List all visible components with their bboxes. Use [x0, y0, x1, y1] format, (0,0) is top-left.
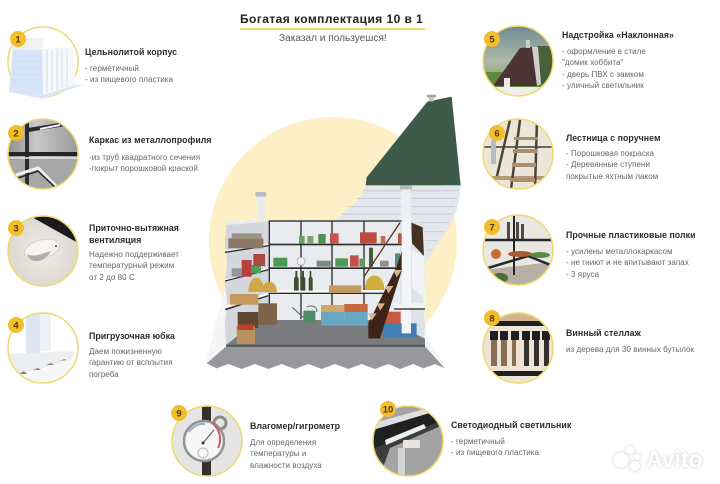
text: item 5: - уличный светильник: [562, 81, 644, 90]
cellar cutaway illustration: [206, 95, 461, 369]
icon 9: hygrometer: [172, 406, 242, 476]
badge 4: 4: [13, 320, 19, 332]
icon 7: shelves: [483, 215, 553, 286]
avito watermark: [614, 446, 703, 472]
badge 1: 1: [15, 34, 21, 46]
text: item 4: гарантию от всплытия: [89, 358, 173, 367]
slab: [207, 345, 445, 369]
floor: [226, 320, 425, 345]
icon 9 ring: [172, 406, 242, 476]
badge 7: 7: [489, 222, 495, 234]
text: item 7: Прочные пластиковые полки: [566, 230, 696, 240]
badge 10: [380, 401, 396, 417]
text: item 6: - Деревянные ступени: [566, 160, 650, 169]
text: item 7: - 3 яруса: [566, 270, 599, 279]
text: item 2: Каркас из металлопрофиля: [89, 135, 212, 145]
avito watermark: Avito: [646, 446, 703, 472]
icon 4 ring: [8, 313, 78, 383]
stairs: [364, 223, 402, 338]
text: item 4: погреба: [89, 370, 119, 379]
icon 3: ventilation: [8, 216, 80, 286]
crates and jars left: [228, 233, 277, 344]
text: item 4: Даем пожизненную: [89, 347, 162, 356]
text: item 3: Надежно поддерживает: [89, 250, 179, 259]
text: item 8: Винный стеллаж: [566, 328, 641, 338]
text: item 4: [89, 331, 175, 379]
badge 1: [10, 31, 26, 47]
hatch: [411, 223, 424, 256]
icon 6: stairs: [483, 119, 553, 189]
stepped white upper body: [335, 186, 461, 265]
text: item 10: Светодиодный светильник: [451, 420, 571, 430]
bottles: [294, 271, 313, 291]
text: item 7: - не гниют и не впитывают запах: [566, 258, 689, 267]
text: item 5: - оформление в стиле: [562, 47, 646, 56]
icon 8: wine rack: [483, 313, 553, 383]
green roof: [366, 97, 461, 185]
badge 9: [171, 405, 187, 421]
left vent pipe: [255, 192, 266, 220]
text: item 6: покрытые яхтным лаком: [566, 172, 658, 181]
text: item 10: [451, 420, 572, 457]
text: item 4: Пригрузочная юбка: [89, 331, 175, 341]
badge 5: [484, 31, 500, 47]
text: item 1: - из пищевого пластика: [85, 75, 173, 84]
icon 5 ring: [483, 26, 553, 96]
icon 10 ring: [373, 406, 443, 476]
icon 2: metal frame: [8, 119, 78, 190]
central yellow circle: [209, 117, 457, 365]
title: Богатая комплектация 10 в 1: [240, 12, 423, 26]
text: item 3: [89, 223, 179, 282]
icon 8 ring: [483, 313, 553, 383]
text: item 3: Приточно-вытяжная: [89, 223, 179, 233]
subtitle: Заказал и пользуешся!: [279, 33, 387, 44]
badge 2: [8, 125, 24, 141]
text: item 10: - из пищевого пластика: [451, 448, 539, 457]
badge 8: 8: [489, 314, 495, 324]
text: item 3: температурный режим: [89, 261, 174, 270]
text: item 3: от 2 до 80 С: [89, 273, 135, 282]
text: item 5: [562, 30, 674, 90]
jars on back shelves: [273, 232, 402, 267]
text: item 9: [250, 421, 340, 470]
text: item 7: - усилены металлокаркасом: [566, 247, 673, 256]
right low shelf: [394, 303, 425, 310]
text: item 5: Надстройка «Наклонная»: [562, 30, 674, 40]
back shelves: [268, 244, 402, 294]
right side wall: [380, 220, 425, 338]
icon 2 ring: [8, 119, 78, 189]
text: item 9: Влагомер/гигрометр: [250, 421, 340, 431]
icon 1: tank: [8, 27, 82, 99]
left shelves: [225, 243, 268, 310]
produce and crates: [292, 275, 417, 337]
room back wall: [227, 219, 424, 347]
text: item 3: вентиляция: [89, 235, 141, 245]
text: item 10: - герметичный: [451, 437, 505, 446]
text: item 9: Для определения: [250, 438, 316, 447]
roof vent: [427, 95, 436, 101]
icon 10: LED light: [373, 404, 443, 478]
icon 7 ring: [483, 215, 553, 285]
text: item 8: из дерева для 30 винных бутылок: [566, 345, 694, 354]
uprights: [269, 220, 402, 319]
badge 7: [484, 219, 500, 235]
text: item 5: "домик хоббита": [562, 58, 623, 67]
badge 10: 10: [383, 404, 393, 416]
text: item 9: температуры и: [250, 449, 306, 458]
text: item 7: [566, 230, 696, 279]
text: item 2: -покрыт порошковой краской: [89, 164, 198, 173]
text: item 6: [566, 133, 661, 181]
badge 8: [484, 310, 500, 326]
white pipe: [400, 185, 412, 333]
badge 2: 2: [13, 128, 19, 140]
badge 3: 3: [13, 224, 19, 234]
icon 4: skirt: [10, 314, 74, 382]
text: item 8: [566, 328, 694, 354]
text: item 1: - герметичный: [85, 64, 139, 73]
text: item 1: [85, 47, 177, 84]
text: item 2: -из труб квадратного сечения: [89, 153, 200, 162]
badge 5: 5: [489, 34, 495, 46]
text: item 5: - дверь ПВХ с замком: [562, 70, 644, 79]
badge 6: [489, 125, 505, 141]
icon 6 ring: [483, 119, 553, 189]
text: item 6: - Порошковая покраска: [566, 149, 654, 158]
icon 3 ring: [8, 216, 78, 286]
title underline: [240, 28, 425, 30]
badge 6: 6: [494, 128, 500, 140]
text: item 9: влажности воздуха: [250, 461, 322, 470]
text: item 2: [89, 135, 212, 173]
text: item 1: Цельнолитой корпус: [85, 47, 177, 57]
badge 4: [8, 317, 24, 333]
text: item 6: Лестница с поручнем: [566, 133, 661, 143]
badge 3: [8, 220, 24, 236]
icon 5: roof add-on: [483, 26, 553, 96]
white wedge right of room: [423, 283, 445, 365]
badge 9: 9: [176, 408, 182, 420]
white wedge left of room: [206, 283, 228, 363]
left side wall: [225, 222, 269, 347]
